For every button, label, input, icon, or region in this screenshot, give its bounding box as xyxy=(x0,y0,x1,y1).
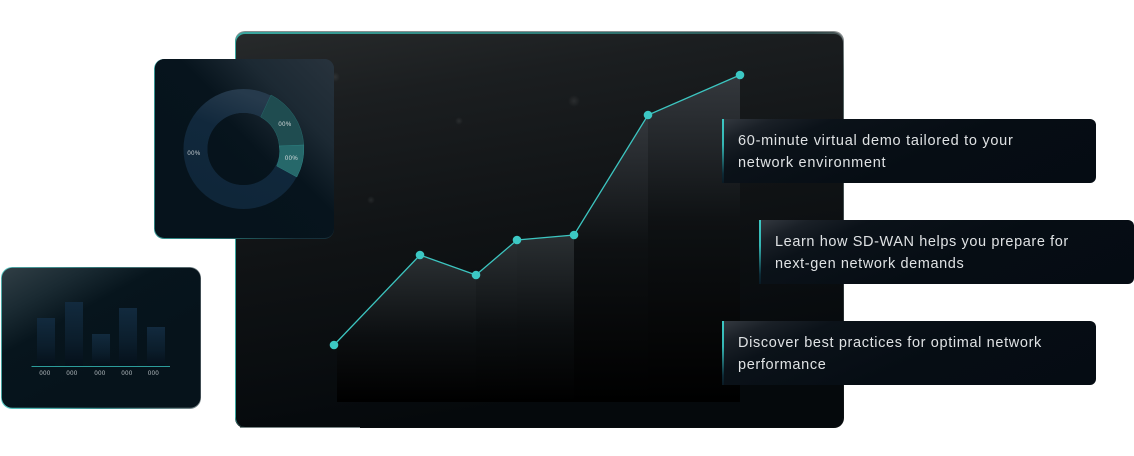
callout: best practices: performance xyxy=(738,357,826,373)
bars xyxy=(37,302,165,366)
callout: SD-WAN xyxy=(759,220,1134,284)
axis labels: 000 xyxy=(39,371,51,377)
line chart xyxy=(330,71,744,402)
main chart panel xyxy=(235,31,844,428)
axis labels: 000 xyxy=(66,371,78,377)
callout: virtual demo xyxy=(722,119,1096,183)
callout: SD-WAN: next-gen network demands xyxy=(775,256,964,272)
axis labels xyxy=(39,371,159,377)
donut chart: 00% xyxy=(187,151,201,157)
axis labels: 000 xyxy=(148,371,159,377)
callout: best practices: Discover best practices for optimal network xyxy=(738,335,1042,351)
donut chart panel xyxy=(154,59,334,239)
donut chart: 00% xyxy=(278,122,292,128)
donut chart xyxy=(187,95,304,197)
axis labels: 000 xyxy=(94,371,106,377)
donut chart: 00% xyxy=(285,156,298,162)
callout: SD-WAN: Learn how SD-WAN helps you prepare for xyxy=(775,234,1069,250)
callout: best practices xyxy=(722,321,1096,385)
axis labels: 000 xyxy=(121,371,133,377)
callout: virtual demo: network environment xyxy=(738,155,886,171)
callout: virtual demo: 60-minute virtual demo tailored to your xyxy=(738,133,1014,149)
bar chart panel xyxy=(1,267,201,409)
axis line xyxy=(32,366,170,367)
